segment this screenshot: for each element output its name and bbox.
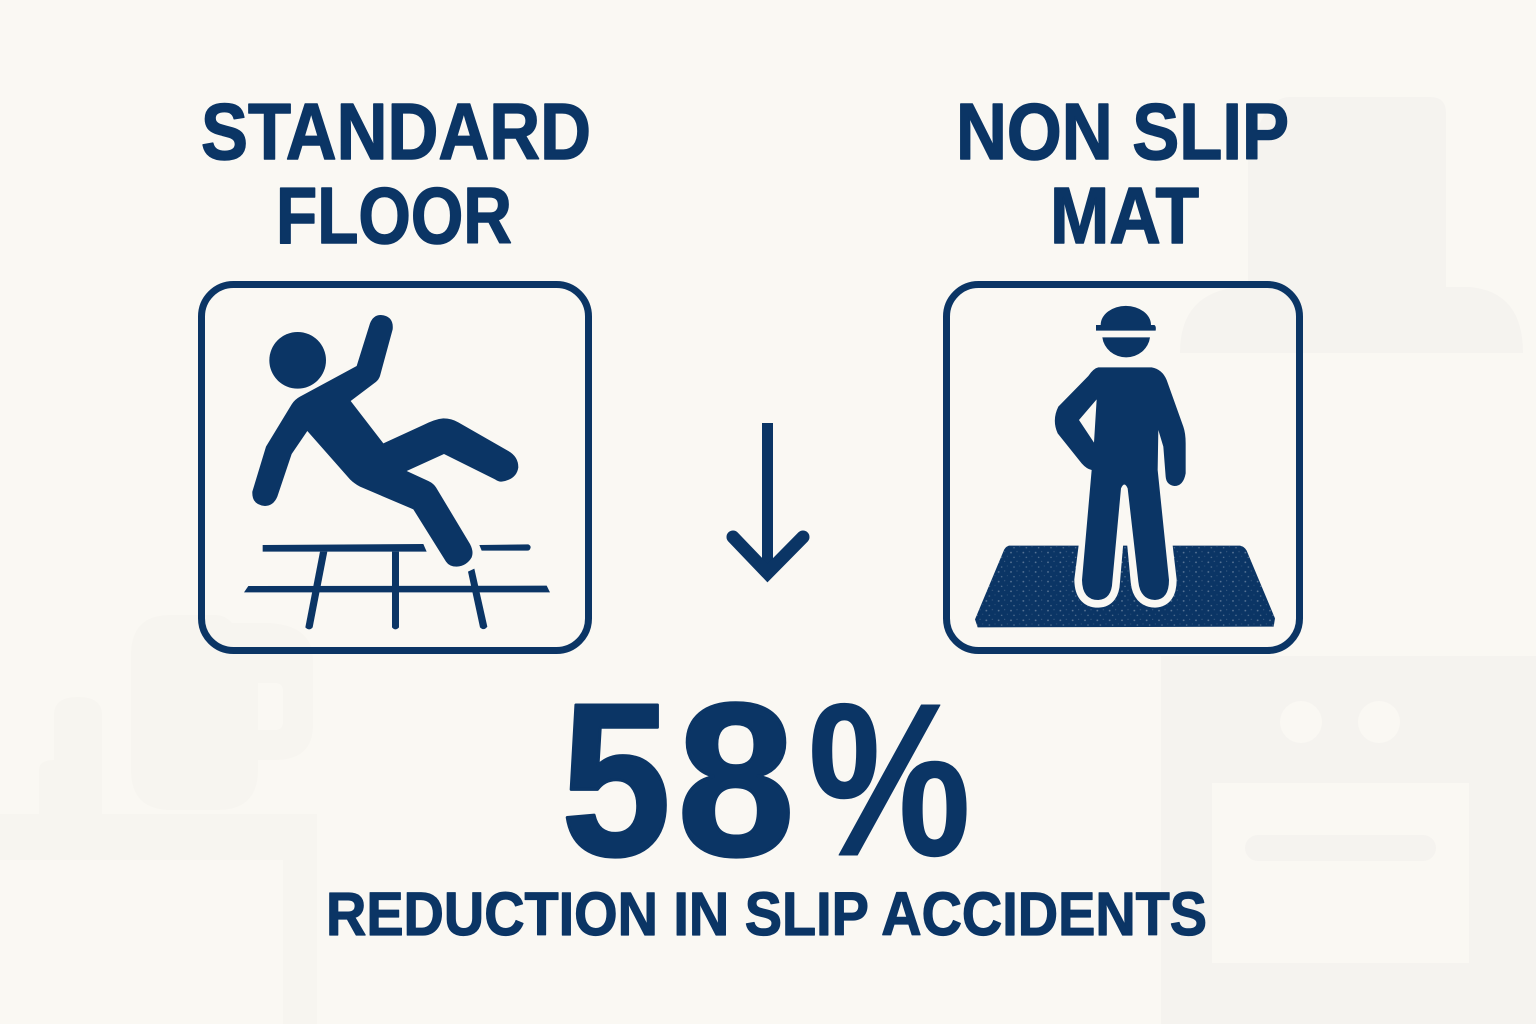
- heading: non slip mat: [956, 87, 1289, 260]
- background silhouette: kettle: [1180, 97, 1523, 353]
- heading: non slip mat: MAT: [1050, 171, 1199, 260]
- statistic: 58%: [561, 659, 971, 902]
- caption: reduction in slip accidents: REDUCTION IN SLIP ACCIDENTS: [326, 880, 1207, 948]
- background silhouette: stove: [1161, 656, 1536, 1024]
- arrow: down: [733, 423, 803, 573]
- mat cutout around legs: [1082, 503, 1169, 600]
- icon: standing worker: [1055, 306, 1186, 600]
- statistic: 58%: %: [808, 659, 971, 902]
- heading: non slip mat: NON SLIP: [956, 87, 1289, 176]
- heading: standard floor: STANDARD: [201, 87, 591, 176]
- panel: standard floor: [202, 284, 588, 650]
- icon: textured mat: [975, 546, 1275, 627]
- statistic: 58%: 5: [561, 659, 671, 902]
- heading: standard floor: FLOOR: [276, 171, 512, 260]
- heading: standard floor: [201, 87, 591, 260]
- icon: cracked floor tiles: [244, 544, 550, 629]
- background silhouette: counter with bottle and mug: [0, 615, 317, 1024]
- statistic: 58%: 8: [677, 659, 795, 902]
- icon: person slipping: [252, 315, 518, 567]
- panel: non slip mat: [946, 284, 1300, 650]
